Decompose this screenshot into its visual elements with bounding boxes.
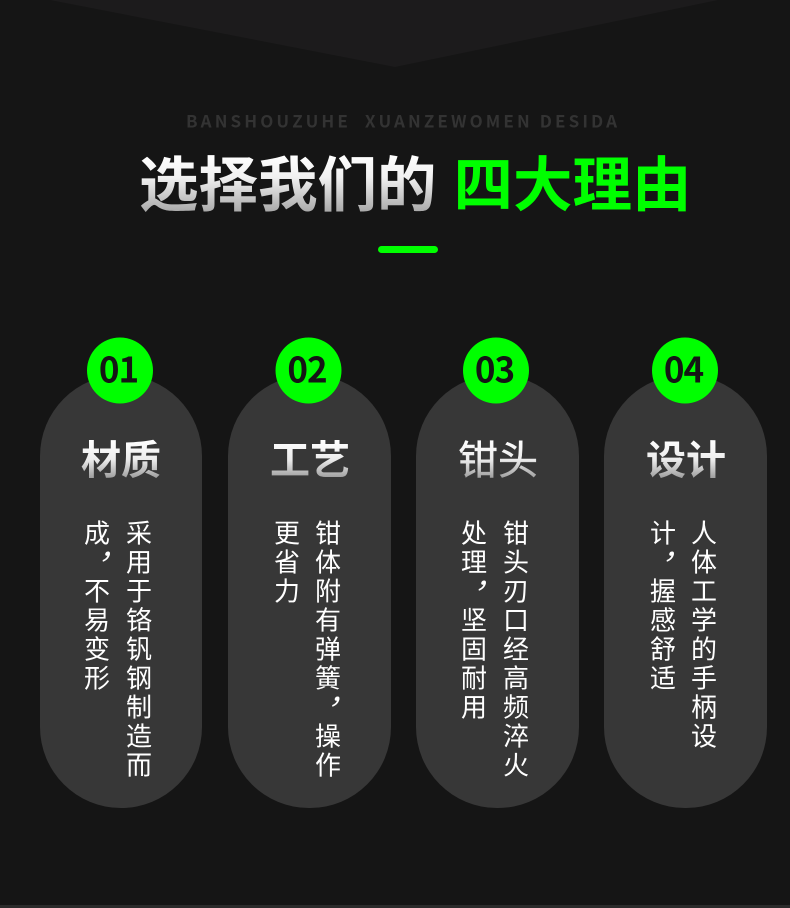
card background bbox=[40, 375, 202, 808]
number badge 03 bbox=[463, 338, 529, 404]
bottom edge line bbox=[0, 905, 790, 908]
number badge 04 bbox=[652, 338, 718, 404]
panel: material bbox=[40, 338, 202, 808]
card background bbox=[604, 375, 767, 808]
panel: pliers head bbox=[416, 338, 579, 808]
title bbox=[139, 138, 692, 224]
title underline bbox=[378, 246, 438, 253]
number badge 02 bbox=[276, 338, 342, 404]
body text: 钳体附有弹簧 bbox=[315, 514, 341, 696]
number badge 02: 02 bbox=[287, 342, 327, 394]
heading: 设计 bbox=[646, 428, 726, 486]
body text: 操作 bbox=[315, 716, 341, 782]
body text: 成 bbox=[84, 514, 110, 550]
body text bbox=[84, 514, 152, 782]
card background bbox=[228, 375, 391, 808]
body text: 采用于铬钒钢制造而 bbox=[126, 514, 152, 782]
number badge 01 bbox=[87, 338, 153, 404]
body text: 人体工学的手柄设 bbox=[691, 514, 717, 754]
heading: 材质 bbox=[81, 428, 161, 486]
subtitle: BANSHOUZUHE XUANZEWOMEN DESIDA bbox=[186, 108, 617, 132]
body text bbox=[461, 514, 529, 782]
heading: 钳头 bbox=[458, 428, 538, 486]
body text: 钳头刃口经高频淬火 bbox=[503, 514, 529, 782]
body text: ， bbox=[663, 524, 693, 568]
panel: craft bbox=[228, 338, 391, 808]
body text: 不易变形 bbox=[84, 572, 110, 696]
title: white part: 选择我们的 bbox=[139, 138, 436, 224]
body text: ， bbox=[99, 524, 129, 568]
panel: design bbox=[604, 338, 767, 808]
body text: 坚固耐用 bbox=[461, 600, 487, 724]
body text bbox=[650, 514, 717, 754]
card background bbox=[416, 375, 579, 808]
body text: 处理 bbox=[461, 514, 487, 580]
title: green part: 四大理由 bbox=[454, 138, 692, 224]
body text: ， bbox=[475, 552, 505, 596]
top chevron bbox=[50, 0, 718, 67]
body text: 计 bbox=[650, 514, 676, 550]
number badge 01: 01 bbox=[99, 342, 138, 394]
number badge 03: 03 bbox=[475, 342, 514, 394]
heading: 工艺 bbox=[270, 428, 350, 486]
body text: ， bbox=[328, 668, 358, 712]
body text: 握感舒适 bbox=[650, 572, 676, 696]
body text: 更省力 bbox=[274, 514, 300, 608]
body text bbox=[274, 514, 358, 782]
number badge 04: 04 bbox=[664, 342, 703, 394]
